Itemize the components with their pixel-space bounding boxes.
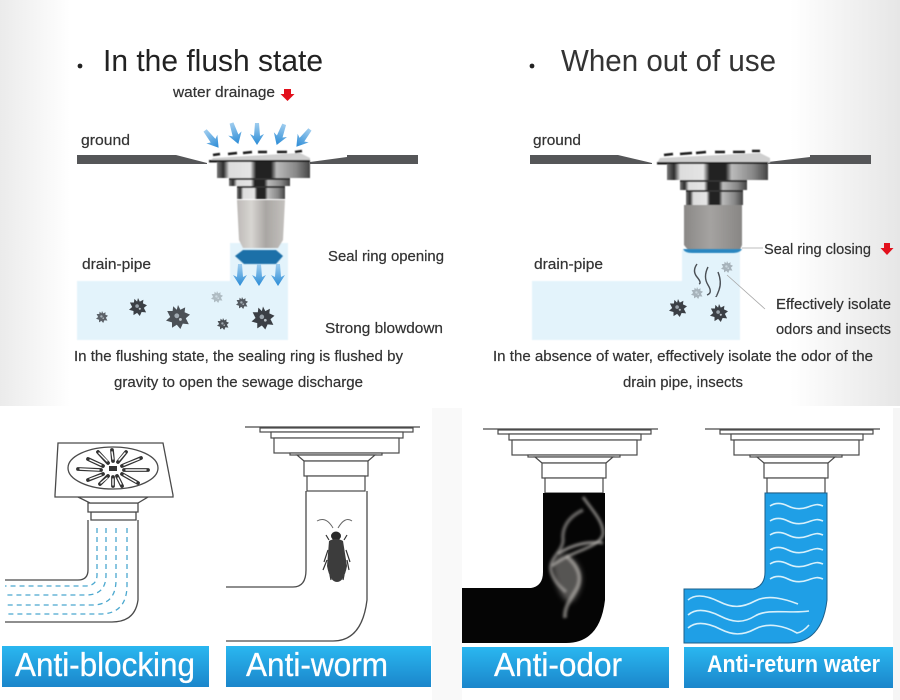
label band: anti-worm — [226, 646, 431, 687]
drain fitting — [483, 429, 658, 493]
caption: out of use: In the absence of water, effectively isolate the odor of the — [493, 349, 873, 365]
label: drain-pipe: drain-pipe — [82, 257, 151, 273]
ground slab — [530, 155, 871, 164]
label: strong blowdown: Strong blowdown — [325, 321, 443, 337]
drain fitting with sleeve — [209, 151, 310, 248]
label: ground: ground — [81, 133, 130, 149]
seal ring, open — [235, 250, 283, 264]
label band: anti-odor: Anti-odor — [494, 646, 622, 683]
icon: cockroach — [317, 520, 352, 582]
label band: anti-return water — [684, 647, 893, 688]
drain illustration with grate — [5, 443, 173, 622]
pipe filled with black — [462, 493, 605, 643]
pipe filled with water — [684, 493, 827, 643]
seal ring, closed — [683, 249, 742, 253]
caption: flush state: gravity to open the sewage discharge — [114, 375, 363, 391]
caption: flush state — [74, 349, 404, 391]
label: seal ring closing with red arrow: Seal ring closing — [764, 242, 871, 258]
drain fitting — [705, 429, 880, 493]
label: water drainage with red arrow: water drainage — [172, 85, 275, 101]
label: drain-pipe: drain-pipe — [534, 257, 603, 273]
drain water area — [532, 250, 740, 340]
water waves — [688, 503, 823, 634]
trapped debris — [669, 261, 733, 322]
heading: flush state: In the flush state — [103, 43, 323, 78]
label band: anti-odor — [462, 646, 669, 688]
label band: anti-return water: Anti-return water — [707, 651, 880, 678]
label: isolate odors and insects: Effectively isolate — [776, 297, 891, 313]
label band: anti-blocking: Anti-blocking — [15, 646, 195, 683]
label band: anti-worm: Anti-worm — [246, 646, 388, 683]
icons: incoming water arrows — [200, 121, 315, 152]
caption: out of use — [493, 349, 873, 391]
drain fitting — [245, 427, 420, 491]
label: ground: ground — [533, 133, 581, 149]
leader lines — [727, 248, 765, 309]
label: seal ring opening: Seal ring opening — [328, 249, 444, 265]
panel: in the flush state — [74, 43, 444, 391]
pipe outline — [226, 491, 367, 641]
caption: out of use: drain pipe, insects — [623, 375, 743, 391]
label: isolate odors and insects — [776, 297, 891, 338]
panel: when out of use — [493, 43, 894, 391]
odor wisps — [694, 264, 720, 296]
label: isolate odors and insects: odors and insects — [776, 322, 891, 338]
debris being flushed — [96, 291, 274, 330]
panel: anti-worm — [226, 427, 431, 687]
caption: flush state: In the flushing state, the sealing ring is flushed by — [74, 349, 404, 365]
panel: anti-odor — [462, 429, 669, 688]
drain fitting with sleeve — [657, 151, 770, 250]
water flow dashes — [5, 528, 127, 614]
smoke — [551, 497, 603, 618]
ground slab — [77, 155, 418, 164]
panel: anti-blocking — [2, 443, 209, 687]
icons: outflow arrows — [233, 264, 285, 286]
heading: out of use: When out of use — [561, 43, 776, 78]
drain water area — [77, 243, 288, 340]
panel: anti-return water — [684, 429, 893, 688]
